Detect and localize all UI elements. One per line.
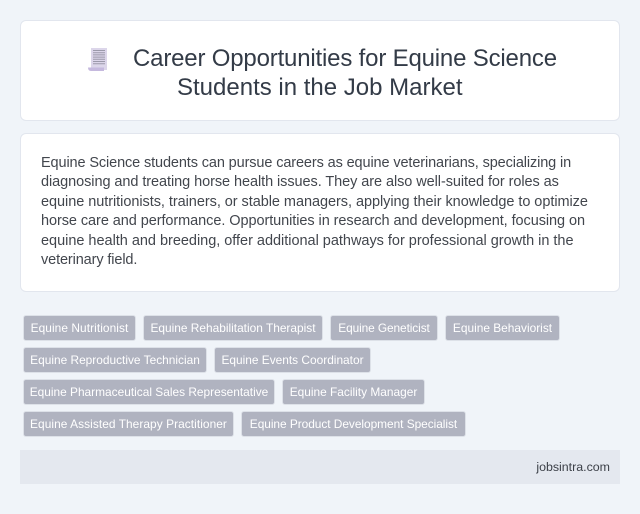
tag [214,347,371,373]
tag: Equine Product Development Specialist [250,417,457,431]
tag: Equine Events Coordinator [221,353,364,367]
header panel [20,20,620,121]
tag [23,411,234,437]
description text [41,155,588,268]
tag: Equine Rehabilitation Therapist [150,321,316,335]
description text: equine nutritionists, trainers, or stable managers, applying their knowledge to optimize [41,194,588,210]
title [133,45,557,101]
description text: diagnosing and treating horse health issues. They are also well-suited for roles as [41,174,559,190]
description text: horse care and performance. Opportunities in research and development, focusing on [41,213,585,229]
tag [143,315,323,341]
description text: veterinary field. [41,252,137,268]
tag: Equine Facility Manager [290,385,417,399]
tag: Equine Pharmaceutical Sales Representative [30,385,268,399]
description panel [20,133,620,292]
tag [330,315,438,341]
tag: Equine Reproductive Technician [30,353,200,367]
tag [23,347,207,373]
tag list [23,315,560,437]
icon: document scroll [88,48,107,71]
title: Students in the Job Market [177,74,462,101]
footer source text: jobsintra.com [536,460,610,474]
tag: Equine Nutritionist [31,321,128,335]
tag: Equine Assisted Therapy Practitioner [30,417,227,431]
description text: Equine Science students can pursue careers as equine veterinarians, specializing in [41,155,571,171]
tag: Equine Geneticist [338,321,430,335]
footer bar [20,450,620,484]
title: Career Opportunities for Equine Science [133,45,557,72]
tag [23,315,136,341]
description text: equine health and breeding, offer additional pathways for professional growth in the [41,233,574,249]
tag [282,379,425,405]
tag [23,379,275,405]
tag: Equine Behaviorist [453,321,552,335]
tag [445,315,560,341]
tag [241,411,466,437]
